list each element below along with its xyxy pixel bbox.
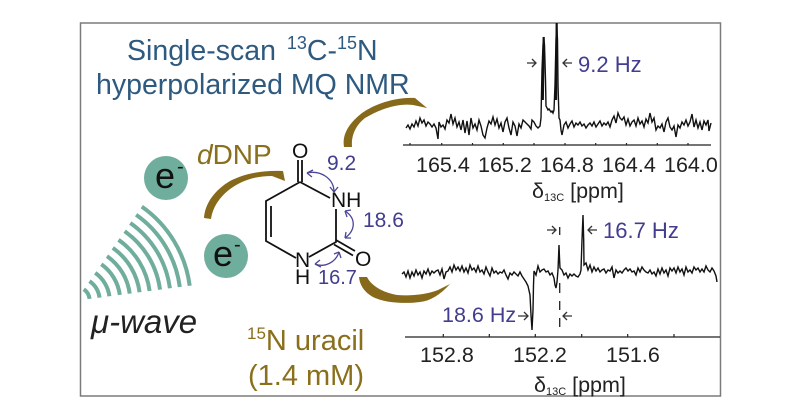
outer frame [80, 23, 720, 396]
label: 15N uracil concentration: (1.4 mM) [248, 360, 364, 392]
chart: top spectrum: 165.4 [416, 153, 470, 177]
coupling constant labels: 18.6 [363, 209, 404, 232]
label: 15N uracil concentration [247, 324, 364, 392]
chart: top spectrum: 164.0 [664, 153, 718, 177]
molecule: uracil structure [266, 140, 371, 289]
title: N [357, 35, 378, 67]
arrow: dDNP gold curve [204, 171, 285, 219]
label: mu-wave: μ-wave [90, 303, 197, 340]
label: 15N uracil concentration: N uracil [266, 325, 364, 357]
chart: bottom spectrum: 18.6 Hz [442, 303, 516, 327]
chart: top spectrum: 164.8 [540, 153, 594, 177]
chart: top spectrum: 9.2 Hz [578, 52, 642, 77]
chart: top spectrum: 13C [544, 192, 564, 204]
label: 15N uracil concentration: 15 [247, 324, 266, 343]
icon: electron bottom: - [234, 234, 241, 256]
chart: top spectrum: 165.2 [478, 153, 532, 177]
coupling constant labels: 16.7 [318, 267, 357, 289]
chart: bottom spectrum [402, 215, 720, 398]
chart: bottom spectrum: [ppm] [566, 373, 626, 397]
molecule: uracil structure: H [295, 266, 310, 289]
molecule: uracil structure: O [355, 248, 371, 271]
title: 15 [337, 33, 357, 53]
arrow: gold curve to top spectrum [344, 98, 427, 147]
icon: electron top [144, 155, 188, 200]
chart: bottom spectrum: 13C [546, 386, 566, 398]
chart: top spectrum: [ppm] [564, 179, 624, 203]
icon: electron top: e [155, 155, 175, 196]
title: Single-scan [127, 35, 276, 67]
coupling constant labels: 9.2 [327, 152, 356, 175]
chart: bottom spectrum: 16.7 Hz [603, 218, 679, 243]
icon: electron bottom [204, 233, 248, 278]
coupling constant labels [318, 152, 404, 289]
icon: microwave arcs [84, 207, 190, 299]
icon: electron bottom: e [213, 233, 233, 274]
chart: bottom spectrum: 152.2 [513, 343, 567, 367]
icon: electron top: - [177, 156, 184, 178]
title: 13 [287, 33, 307, 53]
arrow: gold curve to bottom spectrum [359, 277, 450, 303]
coupling arrows on molecule [307, 170, 353, 267]
molecule: uracil structure: NH [331, 189, 361, 212]
label: dDNP: dDNP [197, 139, 272, 170]
chart: top spectrum [403, 23, 718, 204]
title: C- [307, 35, 337, 67]
molecule: uracil structure: O [292, 140, 308, 163]
chart: top spectrum: 164.4 [602, 153, 656, 177]
chart: bottom spectrum: 152.8 [420, 343, 474, 367]
molecule: uracil structure: N [295, 249, 310, 272]
title [96, 33, 410, 101]
title: hyperpolarized MQ NMR [96, 69, 410, 101]
chart: bottom spectrum: 151.6 [606, 343, 660, 367]
chart: top spectrum: δ [532, 179, 544, 203]
chart: bottom spectrum: δ [534, 373, 546, 397]
